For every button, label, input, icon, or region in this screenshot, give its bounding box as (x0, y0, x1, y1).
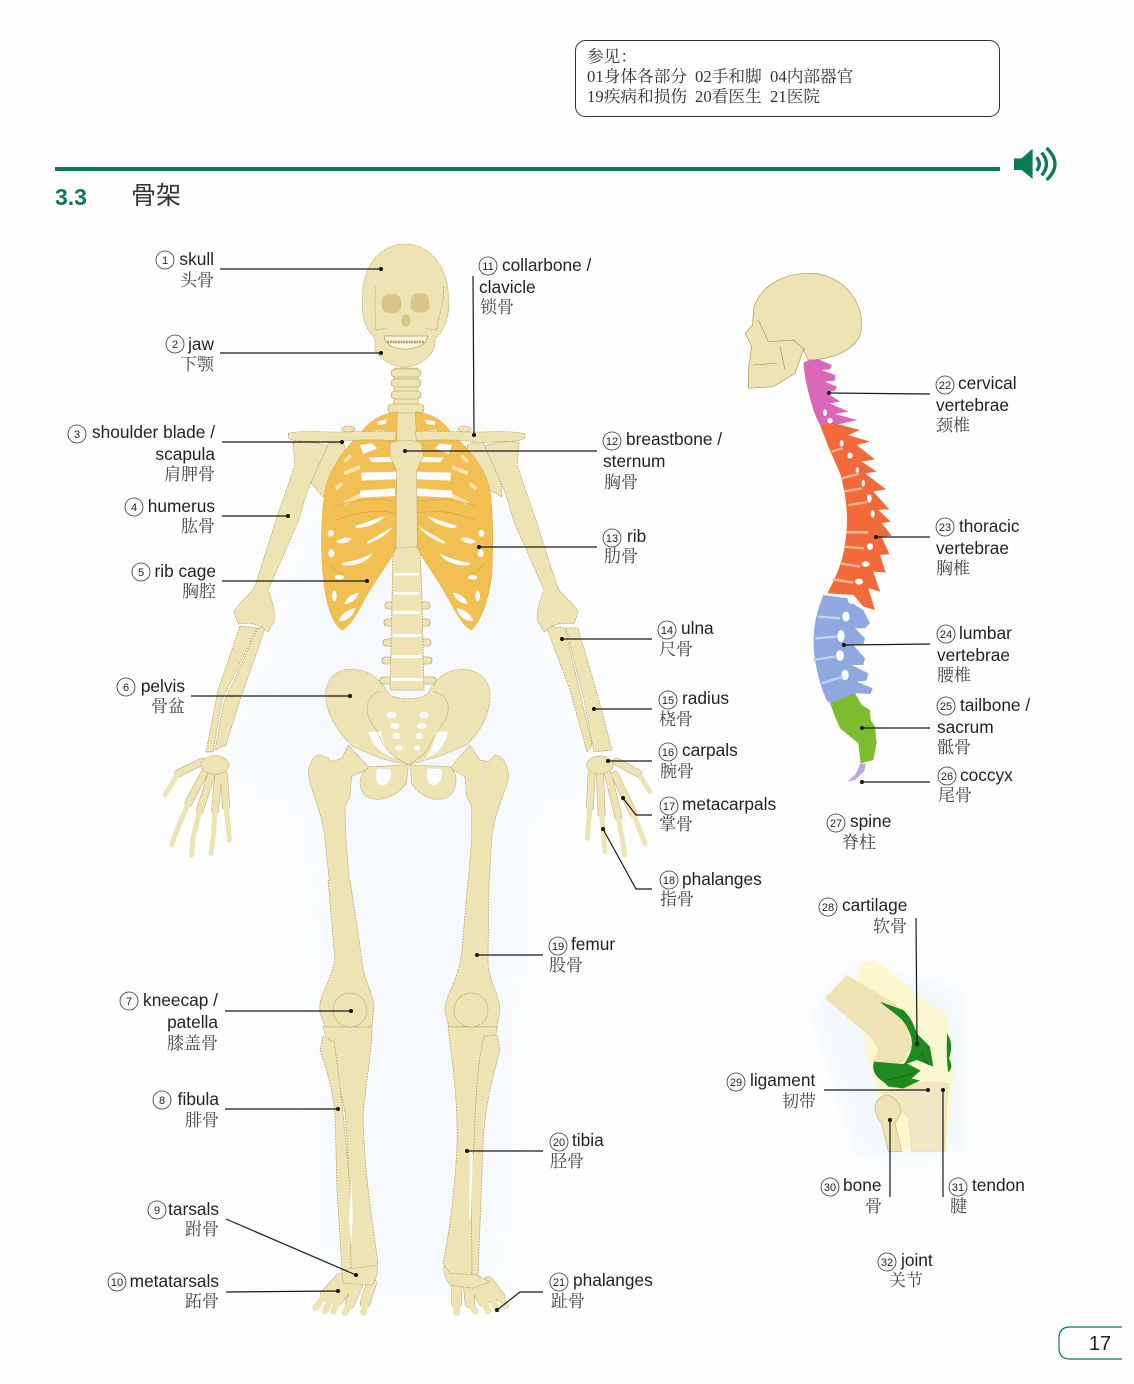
label 3: shoulder blade: 3 (74, 429, 80, 441)
see also box: 01身体各部分 (587, 67, 687, 86)
label 13: rib: 13 (606, 533, 618, 545)
label 13: rib: 肋骨 (604, 547, 638, 566)
pale halo behind skeleton (215, 410, 960, 1300)
label 25: tailbone: sacrum (937, 717, 994, 737)
label 10: metatarsals: 跖骨 (185, 1292, 219, 1311)
label 6: pelvis: 6 (123, 682, 129, 694)
label 15: radius: radius (682, 688, 729, 708)
label 20: tibia: tibia (572, 1130, 604, 1150)
label 1: skull: skull (179, 249, 214, 269)
label 23: thoracic vertebrae: 胸椎 (936, 559, 970, 578)
label 21: phalanges of foot: phalanges (573, 1270, 653, 1290)
see also box: 参见： (587, 47, 637, 66)
skull front view (362, 244, 449, 367)
label 11: collarbone: clavicle (479, 277, 536, 297)
label 20: tibia (465, 1130, 604, 1171)
label 22: cervical vertebrae: 颈椎 (936, 416, 970, 435)
label 17: metacarpals: 掌骨 (659, 815, 693, 834)
pelvis and hips (308, 669, 509, 881)
see also box: 02手和脚 (695, 67, 762, 86)
label 32: joint: joint (900, 1250, 933, 1270)
label 24: lumbar vertebrae: vertebrae (937, 645, 1010, 665)
label 9: tarsals (148, 1199, 358, 1277)
label 5: rib cage: 5 (138, 567, 144, 579)
green cartilage and ligaments (880, 1002, 933, 1067)
label 6: pelvis (117, 676, 352, 716)
section rule (55, 167, 1000, 171)
label 22: cervical vertebrae: 22 (939, 380, 951, 392)
label 18: phalanges: phalanges (682, 869, 762, 889)
label 15: radius: 桡骨 (659, 710, 693, 729)
label 27: spine (827, 811, 891, 852)
label 11: collarbone: collarbone / (502, 255, 592, 275)
clavicles (288, 431, 397, 443)
label 9: tarsals: 跗骨 (185, 1220, 219, 1239)
see also box: 19疾病和损伤 (587, 87, 687, 106)
label 22: cervical vertebrae: cervical (958, 373, 1017, 393)
label 9: tarsals: tarsals (168, 1199, 219, 1219)
label 11: collarbone: 锁骨 (480, 297, 514, 317)
label 11: collarbone (472, 255, 592, 437)
label 20: tibia: 20 (553, 1137, 565, 1149)
femur (825, 975, 912, 1073)
label 7: kneecap: 膝盖骨 (167, 1034, 218, 1053)
section heading: 3.3 (55, 184, 87, 210)
label 26: coccyx: coccyx (960, 765, 1013, 785)
label 7: kneecap: patella (167, 1012, 218, 1032)
see also box: 21医院 (770, 87, 820, 106)
label 22: cervical vertebrae: vertebrae (936, 395, 1009, 415)
see also box: 04内部器官 (770, 67, 853, 86)
knee joint illustration (810, 960, 967, 1157)
label 14: ulna: 14 (661, 625, 673, 637)
label 12: breastbone: breastbone / (626, 429, 722, 449)
label 8: fibula (153, 1089, 340, 1130)
label 26: coccyx (860, 765, 1013, 805)
label 19: femur: 股骨 (549, 956, 583, 975)
label 14: ulna: 尺骨 (659, 640, 693, 659)
sternum (390, 440, 423, 548)
sacrum (830, 693, 877, 763)
label 29: ligament: 韧带 (782, 1092, 816, 1111)
label 7: kneecap: 7 (126, 996, 132, 1008)
label 5: rib cage: rib cage (155, 561, 216, 581)
label 16: carpals: 16 (662, 747, 674, 759)
cervical vertebrae (803, 359, 857, 425)
label 21: phalanges of foot: 趾骨 (551, 1292, 585, 1311)
section heading (55, 182, 181, 210)
label 32: joint: 关节 (889, 1271, 923, 1290)
label 12: breastbone: sternum (603, 451, 665, 471)
label 29: ligament: 29 (730, 1077, 742, 1089)
label 8: fibula: 腓骨 (185, 1111, 219, 1130)
label 27: spine: spine (850, 811, 891, 831)
label 1: skull: 1 (162, 255, 168, 267)
label 23: thoracic vertebrae: vertebrae (936, 538, 1009, 558)
label 17: metacarpals: metacarpals (682, 794, 776, 814)
label 7: kneecap: kneecap / (143, 990, 218, 1010)
label 32: joint: 32 (881, 1257, 893, 1269)
tibia (882, 1082, 948, 1152)
label 1: skull: 头骨 (180, 271, 214, 290)
label 18: phalanges (601, 827, 762, 909)
label 14: ulna (560, 618, 714, 659)
see also box (576, 40, 1000, 116)
feet (316, 1265, 506, 1313)
label 31: tendon: 31 (952, 1182, 964, 1194)
label 30: bone: 30 (824, 1182, 836, 1194)
see also box: 20看医生 (695, 87, 762, 106)
label 6: pelvis: pelvis (141, 676, 185, 696)
label 10: metatarsals: 10 (111, 1277, 123, 1289)
label 30: bone: bone (843, 1175, 881, 1195)
label 31: tendon: tendon (972, 1175, 1025, 1195)
label 3: shoulder blade: 肩胛骨 (164, 465, 215, 484)
label 23: thoracic vertebrae: thoracic (959, 516, 1020, 536)
coccyx (847, 763, 866, 782)
label 25: tailbone: 骶骨 (937, 738, 971, 757)
label 26: coccyx: 26 (941, 771, 953, 783)
label 19: femur (475, 934, 615, 975)
label 23: thoracic vertebrae (874, 516, 1020, 578)
label 11: collarbone: 11 (482, 261, 494, 273)
label 21: phalanges of foot (495, 1270, 653, 1312)
thoracic vertebrae (820, 423, 892, 610)
label 16: carpals: 腕骨 (660, 762, 694, 781)
label 27: spine: 27 (830, 818, 842, 830)
fibula (875, 1095, 902, 1152)
label 24: lumbar vertebrae: 腰椎 (937, 666, 971, 685)
label 19: femur: femur (571, 934, 615, 954)
label 12: breastbone (403, 429, 722, 492)
label 4: humerus: humerus (148, 496, 215, 516)
vertebral column (380, 368, 436, 690)
forearms (206, 626, 612, 752)
label 2: jaw (166, 334, 383, 374)
label 2: jaw: 下颚 (180, 355, 215, 374)
label 28: cartilage: cartilage (842, 895, 907, 915)
label 3: shoulder blade: shoulder blade / (92, 422, 215, 442)
label 15: radius (592, 688, 729, 729)
label 31: tendon (941, 1088, 1025, 1216)
label 30: bone (821, 1118, 892, 1216)
label 2: jaw: jaw (187, 334, 215, 354)
label 12: breastbone: 胸骨 (604, 473, 638, 492)
label 13: rib (477, 526, 646, 566)
label 17: metacarpals: 17 (663, 801, 675, 813)
label 5: rib cage: 胸腔 (182, 582, 216, 601)
label 15: radius: 15 (662, 695, 674, 707)
label 9: tarsals: 9 (154, 1205, 160, 1217)
rib cage (288, 412, 525, 630)
label 21: phalanges of foot: 21 (553, 1277, 565, 1289)
label 5: rib cage (132, 561, 369, 601)
left humerus (234, 442, 331, 632)
scapulae (311, 440, 502, 497)
label 8: fibula: 8 (159, 1095, 165, 1107)
section heading: 骨架 (131, 182, 181, 210)
label 3: shoulder blade: scapula (155, 444, 215, 464)
label 26: coccyx: 尾骨 (938, 786, 972, 805)
label 30: bone: 骨 (865, 1197, 882, 1216)
label 29: ligament (727, 1070, 930, 1111)
page number tab: 17 (1089, 1333, 1111, 1355)
lumbar vertebrae (814, 595, 873, 703)
legs: femurs, tibiae, fibulae (320, 880, 500, 1277)
label 24: lumbar vertebrae (842, 623, 1012, 685)
label 14: ulna: ulna (681, 618, 714, 638)
label 17: metacarpals (621, 794, 776, 834)
label 27: spine: 脊柱 (842, 833, 876, 852)
label 28: cartilage (819, 895, 919, 1046)
label 23: thoracic vertebrae: 23 (939, 522, 951, 534)
label 18: phalanges: 18 (663, 875, 675, 887)
label 1: skull (156, 249, 383, 290)
label 28: cartilage: 28 (822, 902, 834, 914)
label 12: breastbone: 12 (606, 436, 618, 448)
label 4: humerus: 肱骨 (181, 517, 215, 536)
label 2: jaw: 2 (172, 339, 178, 351)
label 8: fibula: fibula (178, 1089, 219, 1109)
label 4: humerus (125, 496, 290, 536)
full skeleton illustration (165, 244, 650, 1313)
label 31: tendon: 腱 (950, 1197, 967, 1216)
label 10: metatarsals: metatarsals (130, 1271, 219, 1291)
label 6: pelvis: 骨盆 (151, 697, 185, 716)
label 16: carpals: carpals (682, 740, 738, 760)
skull side view (745, 273, 862, 388)
hands (165, 756, 650, 855)
spine side view illustration (745, 273, 892, 782)
label 10: metatarsals (108, 1271, 340, 1311)
icon: speaker (1014, 148, 1055, 180)
label 28: cartilage: 软骨 (873, 917, 907, 936)
label 32: joint (878, 1250, 933, 1290)
label 25: tailbone: tailbone / (960, 695, 1030, 715)
label 13: rib: rib (627, 526, 646, 546)
label 18: phalanges: 指骨 (660, 890, 694, 909)
label 25: tailbone: 25 (940, 701, 952, 713)
label 25: tailbone (860, 695, 1030, 757)
label 4: humerus: 4 (131, 502, 137, 514)
label 24: lumbar vertebrae: 24 (940, 629, 952, 641)
label 22: cervical vertebrae (827, 373, 1017, 435)
label 29: ligament: ligament (750, 1070, 816, 1090)
label 20: tibia: 胫骨 (550, 1152, 584, 1171)
cartilage background (857, 960, 953, 1150)
label 16: carpals (606, 740, 738, 781)
page number tab (1059, 1327, 1122, 1359)
label 7: kneecap (120, 990, 353, 1053)
right humerus (481, 442, 578, 632)
label 19: femur: 19 (552, 941, 564, 953)
label 24: lumbar vertebrae: lumbar (959, 623, 1012, 643)
label 3: shoulder blade (68, 422, 344, 484)
